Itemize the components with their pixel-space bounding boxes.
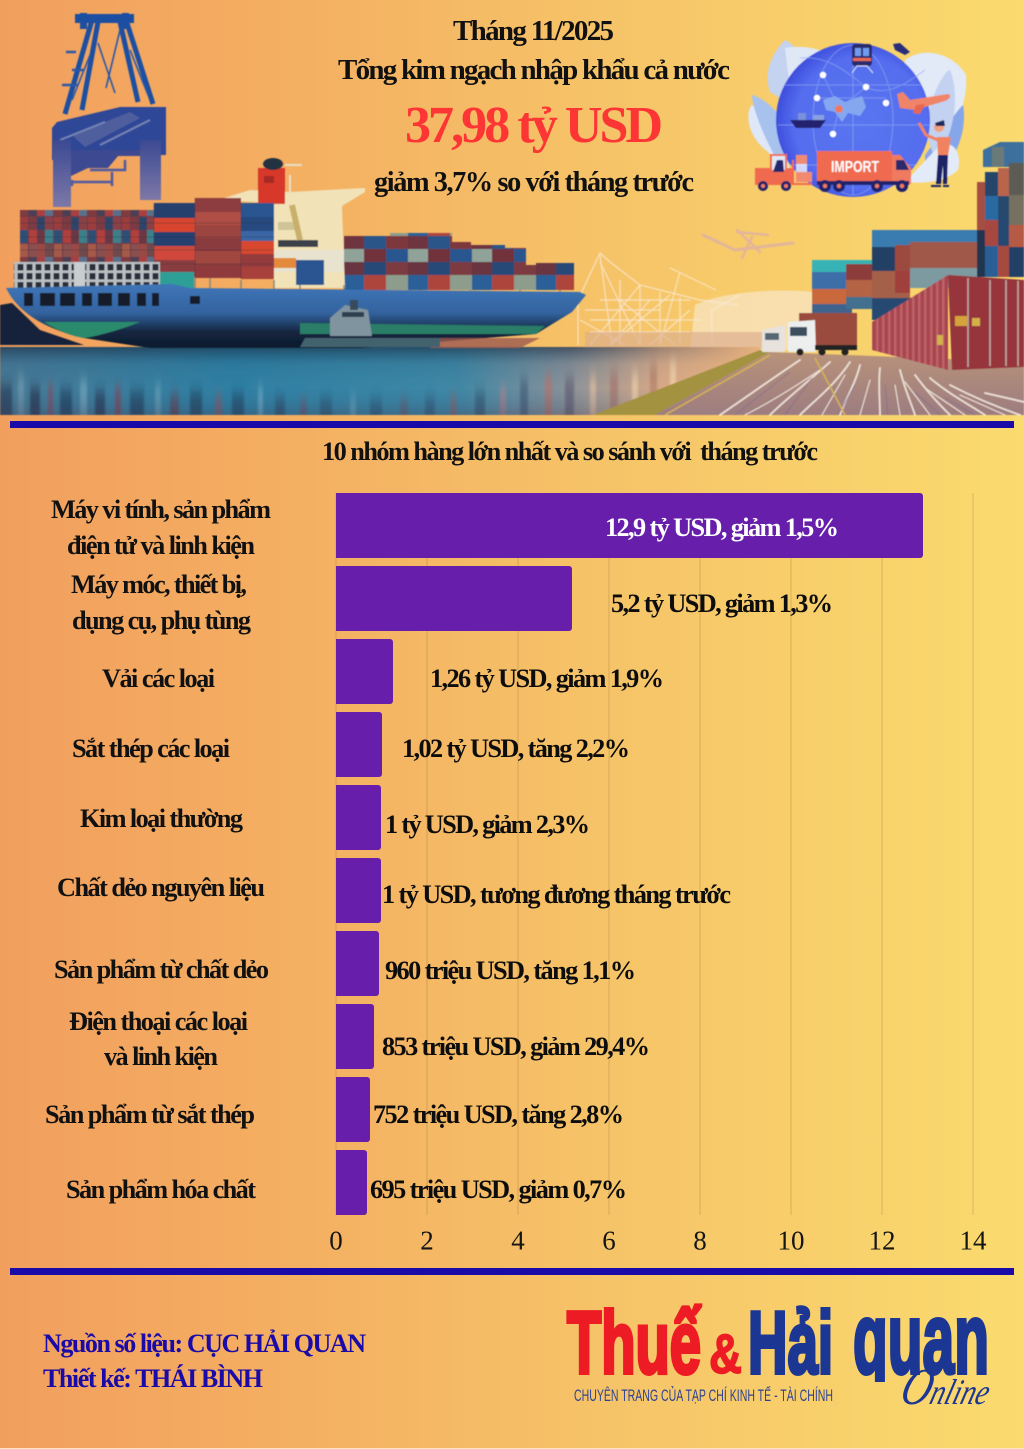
logo: Thuế & Hải quan Online: CHUYÊN TRANG CỦA TẠP CHÍ KINH TẾ - TÀI CHÍNH	[574, 1386, 833, 1405]
rear containers	[344, 233, 574, 290]
logo: Thuế & Hải quan Online: Online	[895, 1359, 999, 1416]
value labels: 960 triệu USD, tăng 1,1%	[385, 956, 636, 985]
category labels: điện tử và linh kiện	[67, 531, 255, 560]
icon: person	[919, 120, 951, 186]
left container stack	[812, 260, 872, 314]
value labels: 5,2 tỷ USD, giảm 1,3%	[611, 589, 833, 618]
logo: Thuế & Hải quan Online: Hải	[748, 1293, 833, 1392]
middle container stack	[872, 230, 977, 320]
category labels: Máy vi tính, sản phẩm	[51, 495, 271, 524]
category labels: Điện thoại các loại	[69, 1007, 248, 1036]
x axis labels: 10	[778, 1226, 804, 1256]
headline figure: 37,98 tỷ USD	[405, 97, 663, 154]
category labels: Chất dẻo nguyên liệu	[57, 873, 265, 902]
funnel	[258, 158, 302, 204]
globe	[776, 43, 930, 197]
stern cabin with windows	[14, 262, 194, 288]
background leaves	[748, 40, 966, 183]
icon: cargo ship	[790, 113, 826, 128]
bar chart: top 10 import groups	[45, 493, 987, 1256]
world map shape	[823, 96, 866, 122]
hazy horizon	[690, 291, 812, 350]
ghost plane	[703, 230, 793, 258]
globe meridians and routes	[778, 45, 930, 195]
icon: rocket	[893, 43, 910, 55]
x axis labels: 8	[693, 1226, 707, 1256]
icon: forklift	[755, 154, 812, 191]
value labels	[370, 513, 839, 1204]
value labels: 1 tỷ USD, giảm 2,3%	[385, 810, 590, 839]
value labels: 1 tỷ USD, tương đương tháng trước	[382, 880, 731, 909]
tugboat	[300, 300, 440, 347]
x axis labels: 4	[511, 1226, 525, 1256]
dark vessel behind stern	[0, 303, 84, 345]
value labels: 752 triệu USD, tăng 2,8%	[373, 1100, 624, 1129]
large red container	[872, 275, 1024, 370]
category labels: Sản phẩm từ chất dẻo	[54, 955, 269, 984]
value labels: 853 triệu USD, giảm 29,4%	[382, 1032, 650, 1061]
category labels: Máy móc, thiết bị,	[71, 570, 247, 599]
x axis labels	[329, 1226, 987, 1256]
logo: Thuế & Hải quan Online	[566, 1303, 990, 1404]
ship bow shadow and red boottop	[430, 338, 540, 348]
front container stacks	[20, 198, 274, 279]
truck label: IMPORT	[831, 159, 879, 176]
deck rail	[195, 278, 560, 295]
chart title: 10 nhóm hàng lớn nhất và so sánh với tháng trước	[322, 437, 818, 466]
ship superstructure	[218, 188, 365, 288]
category labels: Vải các loại	[102, 664, 215, 693]
value labels: 1,02 tỷ USD, tăng 2,2%	[402, 734, 630, 763]
x axis labels: 14	[960, 1226, 987, 1256]
road with light trails	[655, 352, 1024, 415]
x axis labels: 6	[602, 1226, 616, 1256]
source credits: Thiết kế: THÁI BÌNH	[43, 1364, 263, 1393]
category labels: Sắt thép các loại	[72, 734, 230, 763]
route dots	[814, 72, 889, 137]
title: month: Tháng 11/2025	[453, 15, 614, 47]
x axis labels: 12	[868, 1226, 896, 1256]
category labels: dụng cụ, phụ tùng	[72, 606, 251, 635]
category labels: Sản phẩm hóa chất	[66, 1175, 256, 1204]
title: total import turnover: Tổng kim ngạch nhập khẩu cả nước	[338, 54, 730, 86]
port cranes in the haze	[578, 253, 740, 345]
icon: import truck	[817, 151, 911, 192]
value labels: 12,9 tỷ USD, giảm 1,5%	[605, 513, 839, 542]
river bank	[593, 350, 770, 415]
value labels: 695 triệu USD, giảm 0,7%	[370, 1175, 627, 1204]
water with reflections	[0, 347, 760, 427]
icon: globe logistics illustration	[748, 40, 966, 197]
category labels: và linh kiện	[104, 1042, 218, 1071]
icon: plane	[897, 92, 950, 114]
source credits: Nguồn số liệu: CỤC HẢI QUAN	[43, 1329, 366, 1358]
logo: Thuế & Hải quan Online: Thuế	[567, 1293, 702, 1392]
quay crane	[52, 13, 166, 207]
trucks on the road	[762, 313, 857, 356]
x axis labels: 0	[329, 1226, 343, 1256]
month-on-month change: giảm 3,7% so với tháng trước	[374, 167, 694, 198]
ship hull	[6, 284, 586, 348]
category labels: Kim loại thường	[80, 804, 243, 833]
hero illustration: port and container ship	[0, 13, 1024, 427]
category labels	[45, 495, 271, 1204]
right tall container stack	[977, 142, 1024, 277]
value labels: 1,26 tỷ USD, giảm 1,9%	[430, 664, 664, 693]
x axis labels: 2	[420, 1226, 434, 1256]
title block	[338, 15, 730, 198]
icon: train	[852, 44, 873, 73]
category labels: Sản phẩm từ sắt thép	[45, 1100, 255, 1129]
bars	[336, 493, 923, 1215]
chart gridlines	[336, 493, 973, 1215]
logo: Thuế & Hải quan Online: &	[709, 1322, 742, 1385]
source credits	[43, 1329, 366, 1393]
